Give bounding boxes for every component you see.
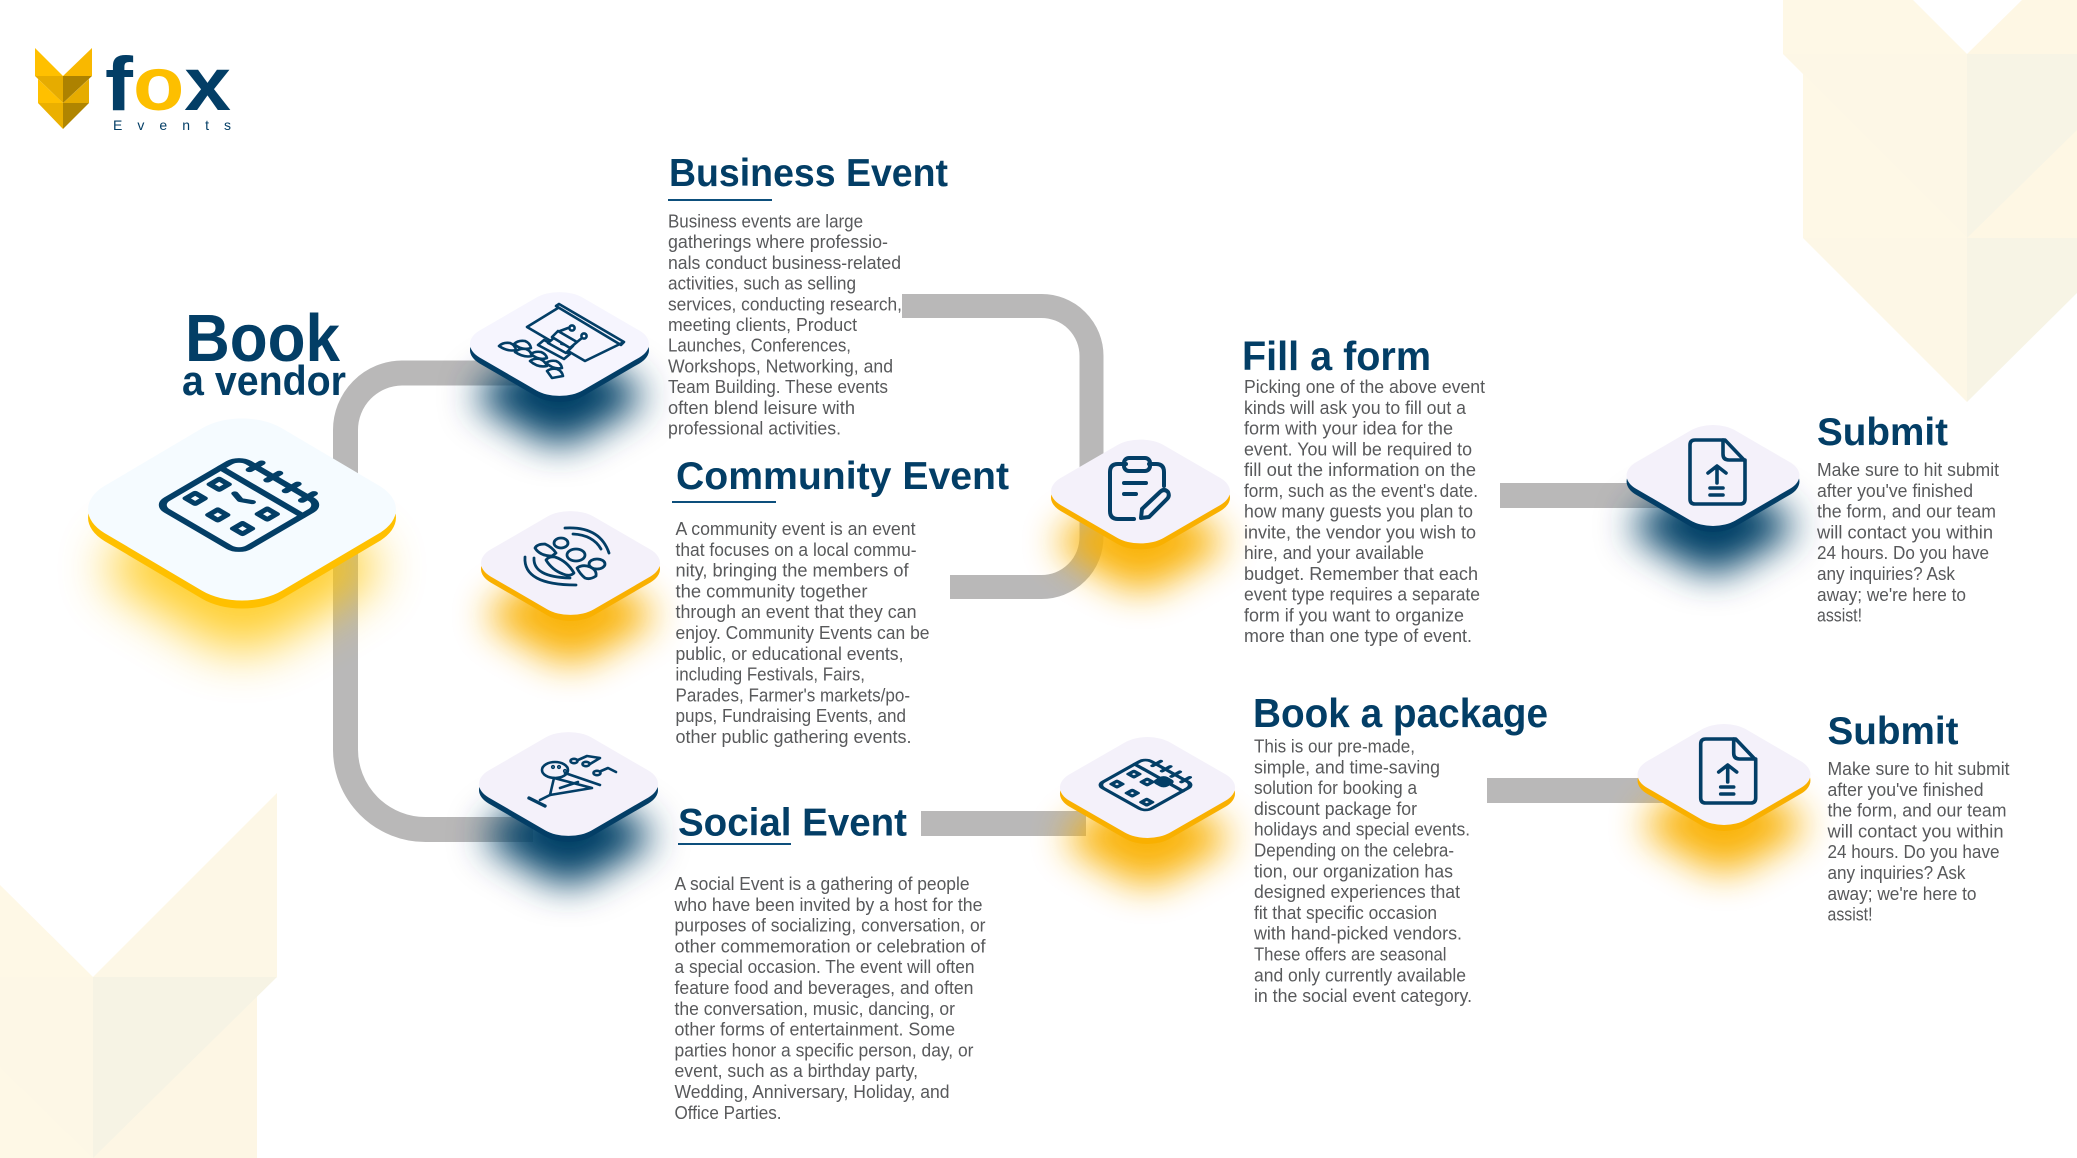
text block: social event: feature food and beverages, and often: [674, 978, 974, 998]
panel: submit diamond bottom: [1624, 716, 1824, 879]
text block: community event: through an event that they can: [676, 602, 916, 622]
logo subtitle: Events: [113, 117, 231, 133]
text block: social event: parties honor a specific person, day, or: [674, 1040, 974, 1060]
text block: fill a form: Picking one of the above event: [1244, 377, 1485, 397]
text block: fill a form: event type requires a separate: [1244, 584, 1480, 604]
text block: book a package: Depending on the celebra-: [1254, 840, 1454, 860]
icon: file upload: [1701, 739, 1756, 803]
text block: book a package: and only currently available: [1254, 965, 1466, 985]
panel: business event diamond: [456, 284, 663, 451]
text block: submit top: after you've finished: [1817, 481, 1973, 501]
heading: submit: Submit: [1828, 710, 1958, 753]
text block: fill a form: hire, and your available: [1244, 543, 1424, 563]
text block: social event: Office Parties.: [674, 1103, 782, 1123]
text block: book a package: holidays and special events.: [1254, 820, 1470, 840]
text block: submit bottom: will contact you within: [1826, 821, 2004, 841]
background pattern: top right fox: [1783, 0, 2077, 402]
text block: community event: pups, Fundraising Events, and: [676, 706, 906, 726]
connector: book a package to submit: [1487, 778, 1682, 803]
text block: submit top: assist!: [1817, 606, 1862, 626]
logo: [35, 42, 231, 133]
text block: social event: who have been invited by a host for the: [674, 895, 982, 915]
text block: fill a form: fill out the information on the: [1244, 460, 1476, 480]
text block: fill a form: kinds will ask you to fill out a: [1244, 398, 1467, 418]
heading: business event: Business Event: [669, 152, 948, 195]
text block: submit top: [1816, 411, 1999, 626]
connector: main to business and social: [345, 373, 533, 830]
heading: book a package: Book a package: [1253, 690, 1548, 736]
text block: business event: gatherings where professio-: [668, 232, 888, 252]
text block: book a package: fit that specific occasion: [1254, 903, 1437, 923]
icon: clipboard with pencil: [1110, 458, 1169, 519]
text block: community event: A community event is an event: [676, 519, 916, 539]
text block: book a package: designed experiences that: [1254, 882, 1460, 902]
title: book a vendor: Book: [185, 301, 341, 376]
text block: book a package: [1253, 690, 1548, 1006]
text block: submit top: will contact you within: [1816, 522, 1993, 542]
text block: business event: activities, such as selling: [668, 274, 856, 294]
text block: business event: meeting clients, Product: [668, 315, 857, 335]
text block: social event: purposes of socializing, conversation, or: [674, 916, 986, 936]
text block: submit bottom: any inquiries? Ask: [1828, 863, 1966, 883]
text block: submit top: Make sure to hit submit: [1817, 460, 1999, 480]
text block: submit bottom: [1826, 710, 2010, 925]
logo wordmark: fox: [105, 42, 231, 127]
text block: social event: [674, 802, 986, 1123]
text block: business event: [668, 152, 948, 438]
text block: business event: professional activities.: [668, 418, 841, 438]
text block: business event: Team Building. These events: [668, 377, 888, 397]
text block: book a package: with hand-picked vendors.: [1253, 924, 1462, 944]
text block: fill a form: form if you want to organize: [1244, 605, 1464, 625]
heading: submit: Submit: [1817, 411, 1948, 454]
text block: social event: a special occasion. The event will often: [674, 957, 974, 977]
text block: book a package: tion, our organization has: [1254, 861, 1453, 881]
icon: presentation and audience: [499, 304, 624, 378]
text block: social event: the conversation, music, dancing, or: [674, 999, 955, 1019]
text block: submit top: any inquiries? Ask: [1817, 564, 1956, 584]
connector: business and community to fill a form: [902, 306, 1092, 587]
text block: community event: the community together: [676, 581, 868, 601]
text block: social event: Wedding, Anniversary, Holiday, and: [674, 1082, 950, 1102]
text block: submit bottom: away; we're here to: [1828, 884, 1976, 904]
text block: community event: including Festivals, Fairs,: [676, 665, 865, 685]
title: book a vendor: [182, 301, 346, 404]
text block: fill a form: [1242, 333, 1485, 646]
text block: community event: [672, 455, 1009, 747]
title: book a vendor: a vendor: [182, 357, 346, 404]
text block: community event: other public gathering events.: [676, 727, 912, 747]
connector: fill a form to submit: [1500, 483, 1670, 508]
text block: business event: nals conduct business-related: [668, 253, 901, 273]
text block: fill a form: more than one type of event.: [1244, 626, 1472, 646]
text block: community event: Parades, Farmer's markets/po-: [676, 685, 910, 705]
text block: community event: enjoy. Community Events can be: [676, 623, 930, 643]
heading: community event: Community Event: [676, 455, 1009, 498]
text block: business event: Business events are large: [668, 212, 863, 232]
panel: fill a form diamond: [1037, 432, 1244, 597]
text block: submit bottom: after you've finished: [1828, 780, 1984, 800]
text block: business event: Workshops, Networking, and: [668, 356, 893, 376]
text block: community event: public, or educational events,: [676, 644, 904, 664]
text block: fill a form: event. You will be required to: [1244, 439, 1472, 459]
text block: book a package: in the social event category.: [1254, 986, 1472, 1006]
text block: submit top: the form, and our team: [1817, 502, 1996, 522]
icon: calendar: [157, 453, 327, 553]
text block: social event: other commemoration or celebration of: [674, 936, 986, 956]
text block: submit bottom: assist!: [1828, 905, 1872, 925]
icon: cocktail and music: [529, 756, 616, 806]
text block: book a package: simple, and time-saving: [1254, 757, 1440, 777]
icon: community group: [525, 528, 609, 585]
text block: social event: event, such as a birthday party,: [674, 1061, 918, 1081]
text block: social event: other forms of entertainment. Some: [674, 1020, 955, 1040]
connector: social to book a package: [921, 811, 1086, 836]
heading: social event: Social Event: [678, 802, 907, 844]
text block: book a package: These offers are seasonal: [1254, 944, 1446, 964]
panel: submit diamond top: [1613, 417, 1813, 580]
text block: submit bottom: the form, and our team: [1828, 801, 2006, 821]
panel: community event diamond: [467, 503, 674, 670]
panel: book a package diamond: [1047, 729, 1248, 892]
heading: fill a form: Fill a form: [1242, 333, 1431, 379]
icon: file upload: [1690, 440, 1745, 504]
text block: fill a form: invite, the vendor you wish to: [1244, 522, 1476, 542]
text block: submit bottom: Make sure to hit submit: [1828, 759, 2010, 779]
text block: community event: nity, bringing the members of: [676, 561, 910, 581]
text block: fill a form: form, such as the event's date.: [1244, 481, 1478, 501]
text block: fill a form: form with your idea for the: [1244, 418, 1453, 438]
text block: submit top: 24 hours. Do you have: [1817, 543, 1989, 563]
icon: calendar with pin: [1098, 755, 1198, 812]
text block: business event: services, conducting research,: [668, 294, 902, 314]
text block: fill a form: how many guests you plan to: [1244, 502, 1473, 522]
text block: book a package: This is our pre-made,: [1254, 736, 1415, 756]
icon: fox head: [35, 48, 92, 129]
text block: community event: that focuses on a local commu-: [676, 540, 916, 560]
text block: book a package: solution for booking a: [1254, 778, 1418, 798]
background pattern: bottom left fox: [0, 793, 277, 1158]
panel: book a vendor diamond: [65, 405, 419, 663]
text block: submit top: away; we're here to: [1817, 585, 1966, 605]
panel: social event diamond: [465, 724, 672, 891]
text block: business event: Launches, Conferences,: [668, 336, 851, 356]
text block: fill a form: budget. Remember that each: [1244, 564, 1478, 584]
text block: business event: often blend leisure with: [668, 398, 855, 418]
text block: submit bottom: 24 hours. Do you have: [1828, 842, 2000, 862]
text block: social event: A social Event is a gathering of people: [674, 874, 970, 894]
text block: book a package: discount package for: [1254, 799, 1417, 819]
